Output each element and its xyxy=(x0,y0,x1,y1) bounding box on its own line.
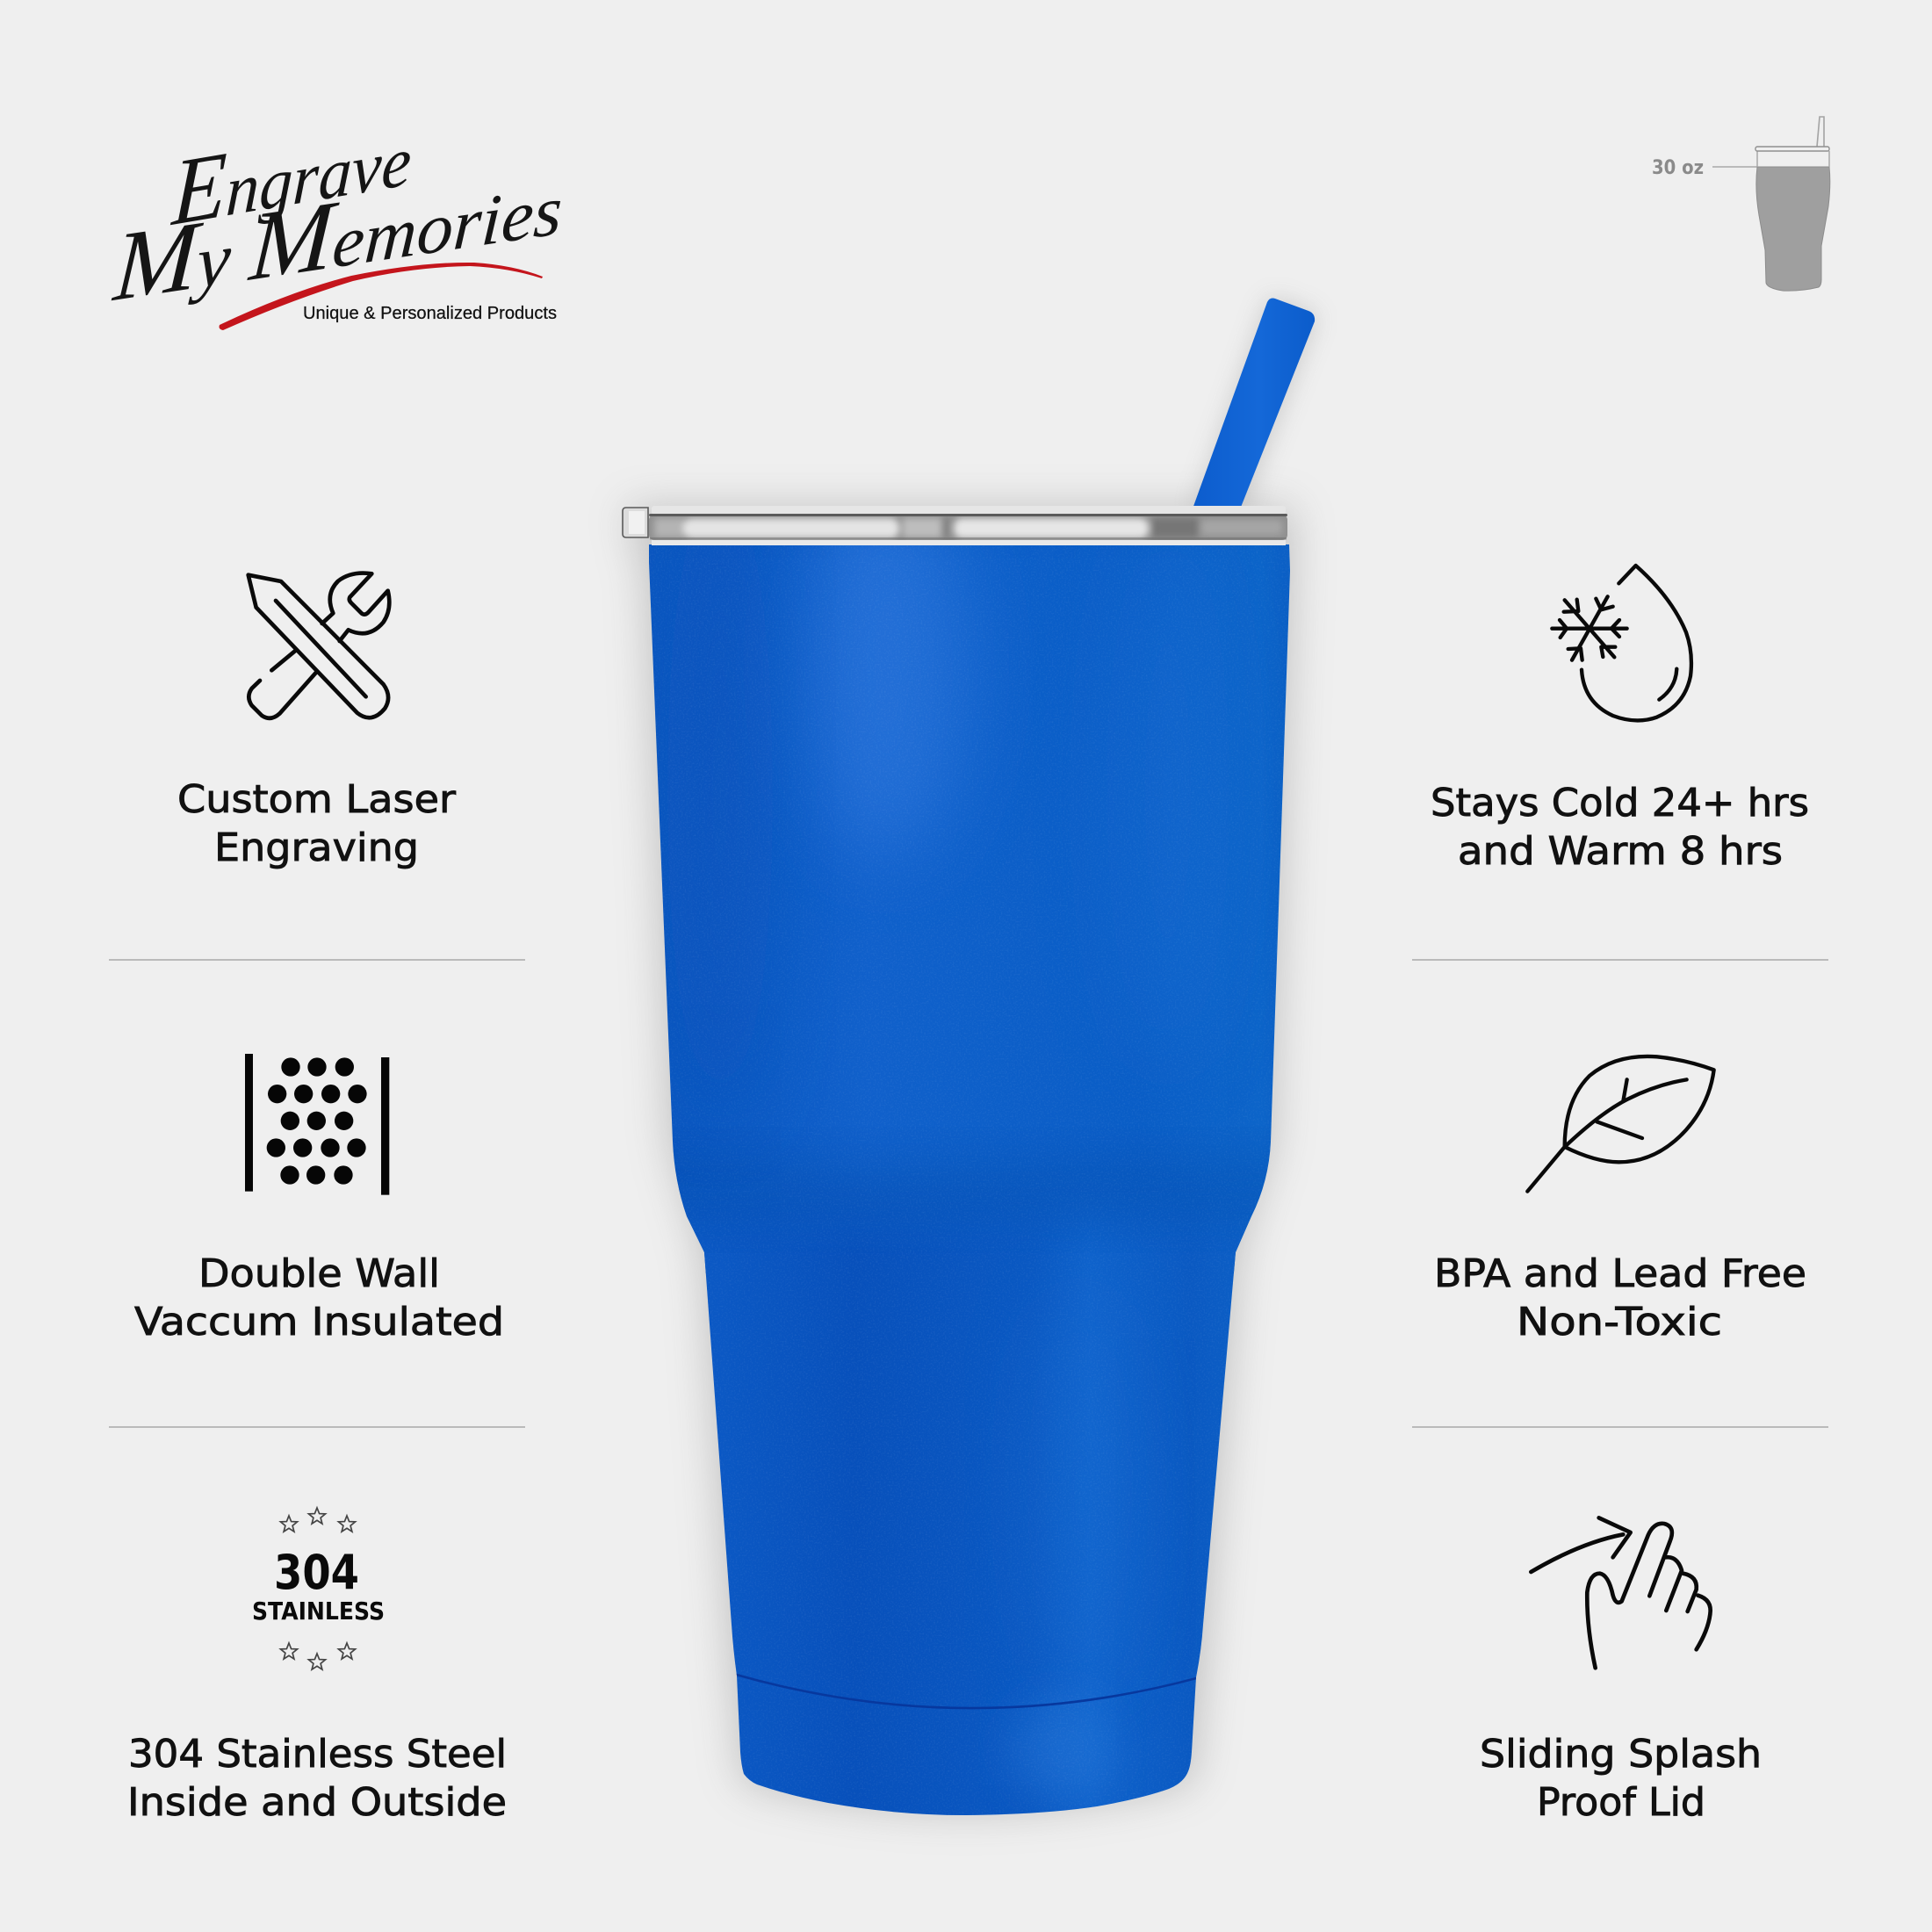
icon: double wall dots xyxy=(245,1054,389,1195)
icon: snowflake and drop xyxy=(1552,566,1691,720)
logo tagline: Unique & Personalized Products xyxy=(303,304,557,323)
divider left 1 xyxy=(109,959,525,961)
divider left 2 xyxy=(109,1426,525,1428)
mini tumbler icon xyxy=(1755,117,1830,291)
icon: 304 stainless badge: STAINLESS xyxy=(252,1597,385,1626)
label: 304 Stainless Steel xyxy=(128,1732,507,1777)
grain xyxy=(632,536,1308,1835)
divider right 2 xyxy=(1412,1426,1828,1428)
label xyxy=(134,1251,504,1344)
tumbler shadow xyxy=(625,508,1293,1811)
infographic canvas xyxy=(109,116,1830,1830)
logo word: Engrave: Engrave xyxy=(169,100,414,247)
feature: BPA and lead free xyxy=(1434,1056,1806,1344)
straw xyxy=(1192,299,1315,514)
label: Sliding Splash xyxy=(1480,1732,1762,1777)
size label: 30 oz xyxy=(1652,157,1704,179)
label xyxy=(1431,781,1809,874)
logo: Engrave My Memories xyxy=(109,100,566,330)
product: blue tumbler xyxy=(615,297,1317,1844)
feature: double wall insulation xyxy=(134,1054,504,1344)
label: Double Wall xyxy=(198,1251,440,1296)
feature: temperature retention xyxy=(1431,566,1809,874)
label: Custom Laser xyxy=(177,777,457,822)
label xyxy=(127,1732,507,1825)
size indicator: 30 oz xyxy=(1652,117,1830,291)
logo words: My Memories: My Memories xyxy=(109,147,566,323)
label: Non-Toxic xyxy=(1517,1300,1722,1344)
tumbler body xyxy=(649,544,1290,1815)
feature: custom laser engraving xyxy=(177,573,457,870)
icon: hand swipe with arrow xyxy=(1531,1517,1711,1668)
shoulder shading xyxy=(674,1154,1270,1215)
icon: leaf xyxy=(1527,1056,1714,1192)
icon: 304 stainless badge: 304 xyxy=(274,1545,359,1600)
label: Engraving xyxy=(214,825,419,870)
label: Inside and Outside xyxy=(127,1780,507,1825)
label: Vaccum Insulated xyxy=(134,1300,504,1344)
feature: 304 stainless steel xyxy=(127,1508,507,1825)
label xyxy=(177,777,457,870)
label: and Warm 8 hrs xyxy=(1458,829,1783,874)
logo red swoosh xyxy=(220,263,543,330)
icon: 304 stainless badge xyxy=(252,1508,385,1669)
base seam xyxy=(733,1674,1200,1708)
label xyxy=(1480,1732,1762,1825)
divider right 1 xyxy=(1412,959,1828,961)
label: BPA and Lead Free xyxy=(1434,1251,1806,1296)
label: Proof Lid xyxy=(1537,1780,1705,1825)
icon: crossed tools xyxy=(249,573,389,718)
lid xyxy=(623,506,1287,545)
label: Stays Cold 24+ hrs xyxy=(1431,781,1809,825)
label xyxy=(1434,1251,1806,1344)
upper highlight xyxy=(806,545,970,845)
feature: sliding splash proof lid xyxy=(1480,1517,1762,1825)
